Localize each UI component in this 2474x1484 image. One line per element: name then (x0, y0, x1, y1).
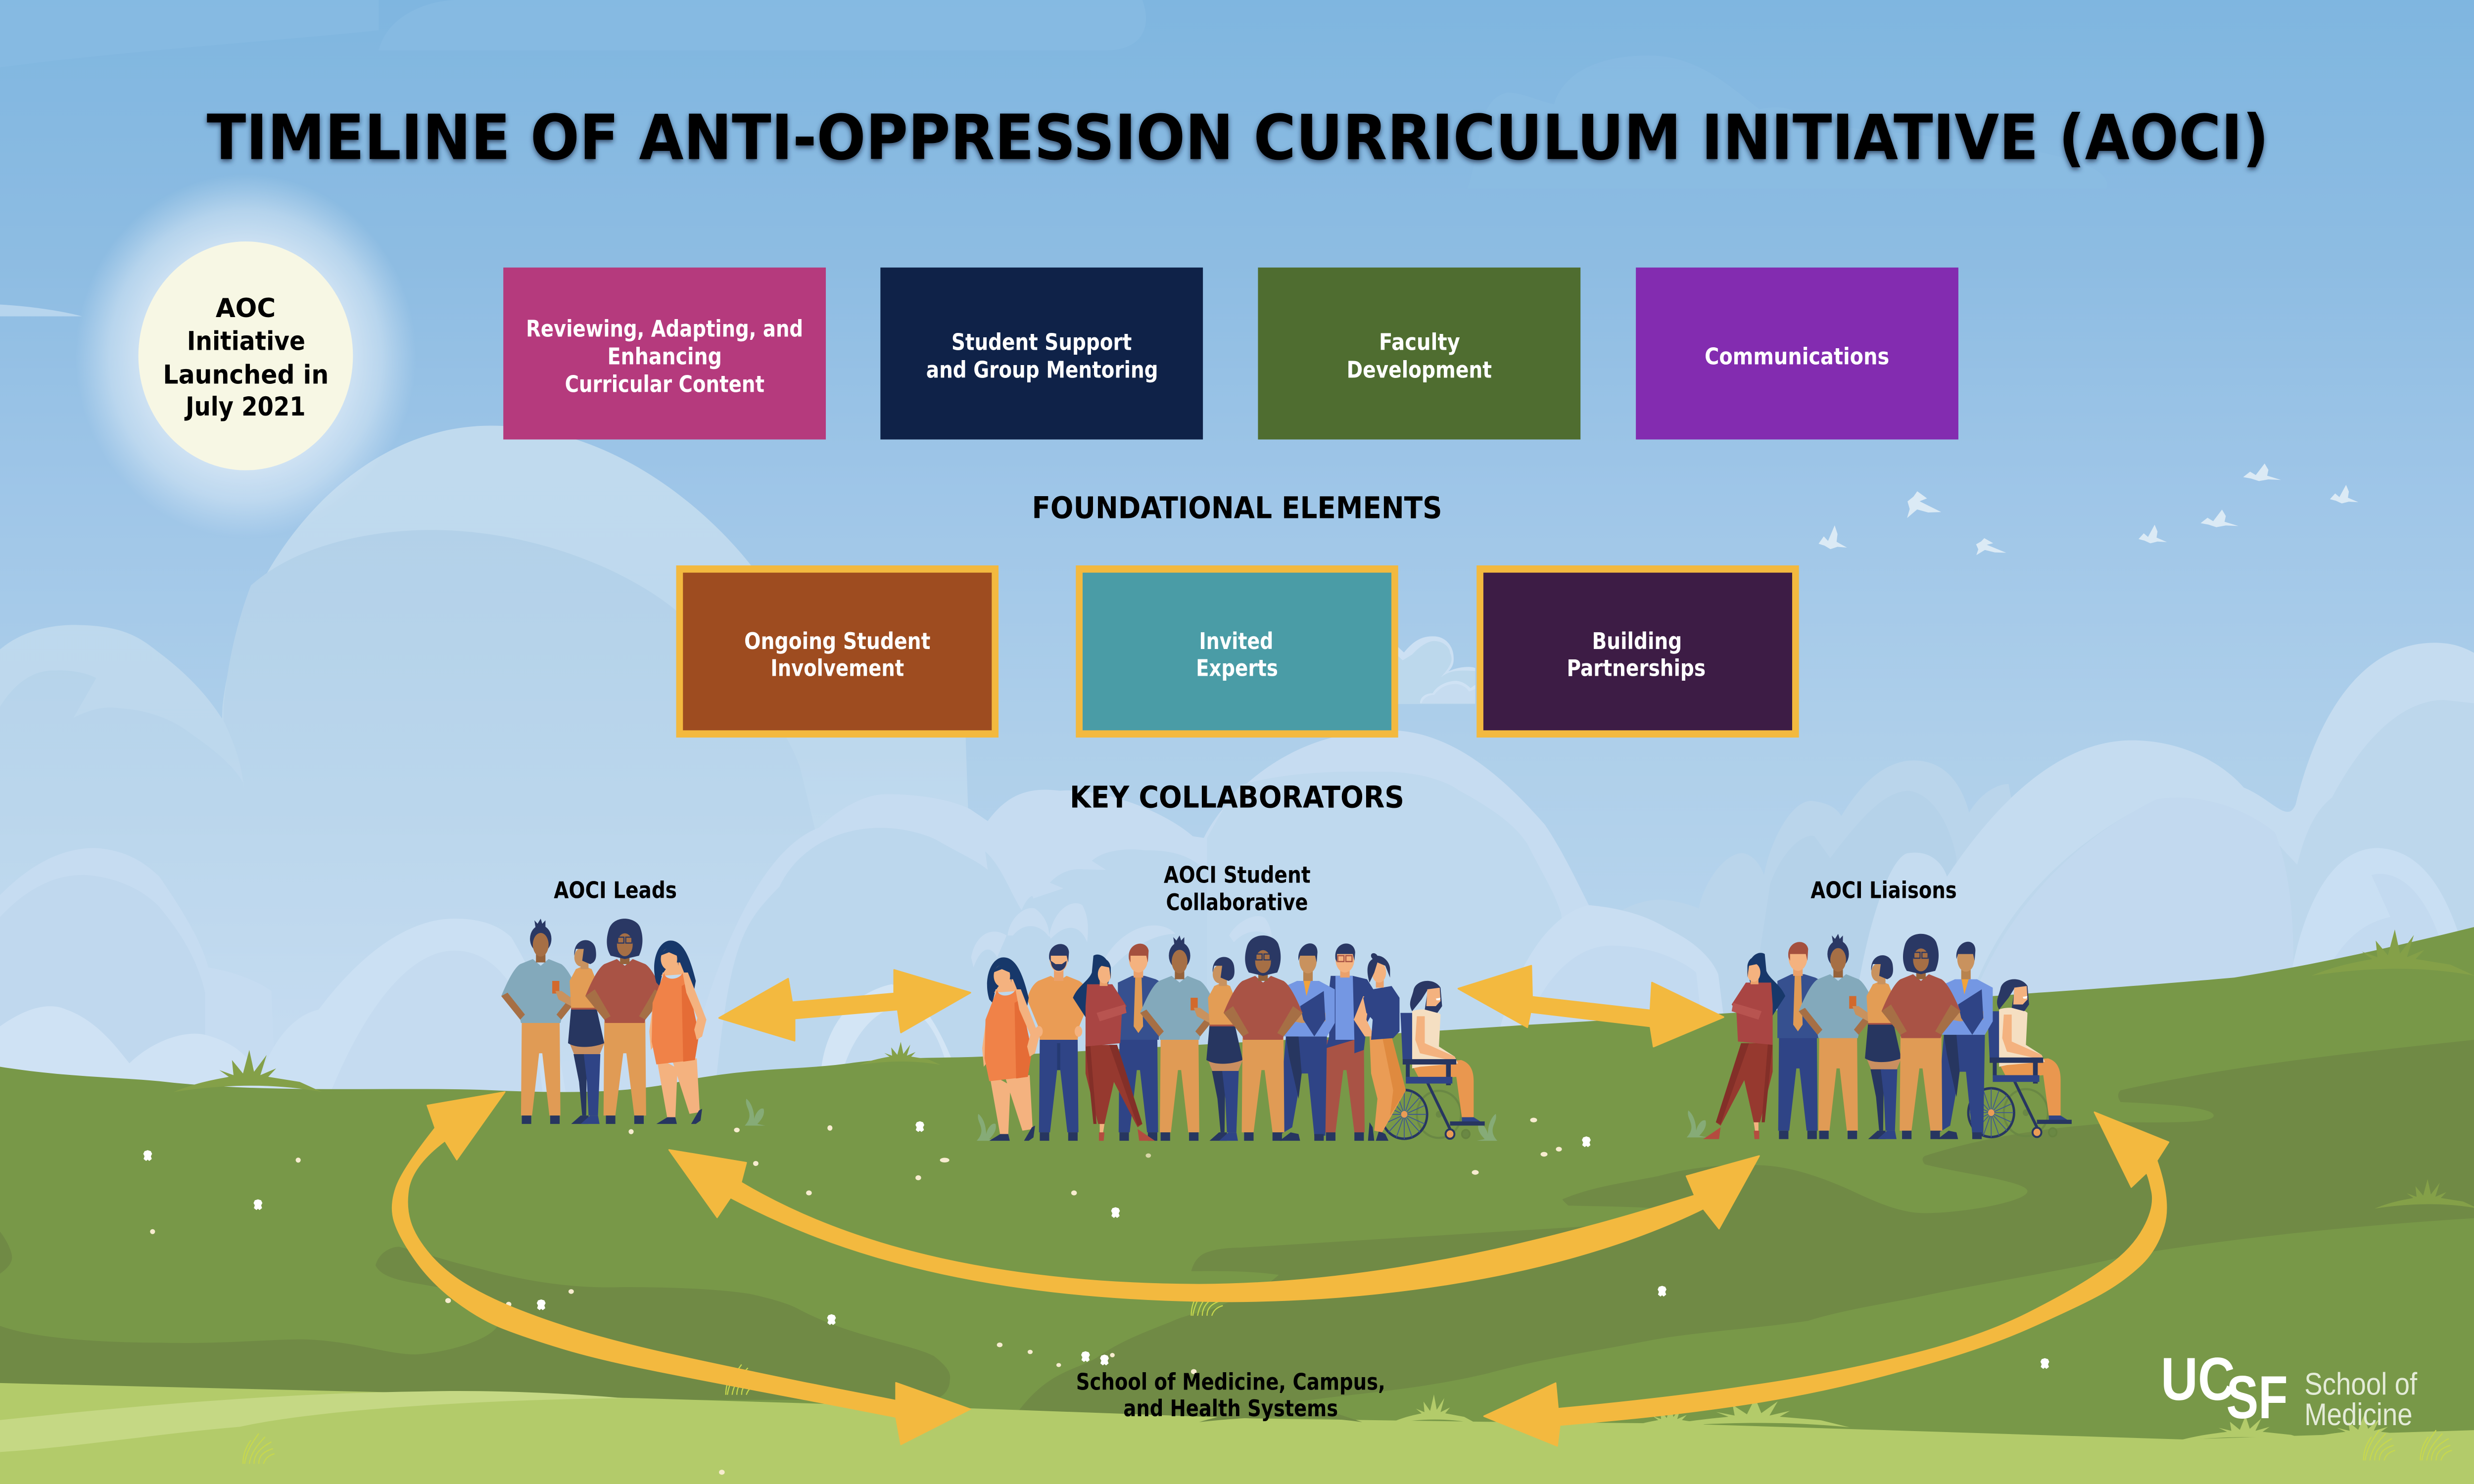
panel: ongoing student involvement (679, 569, 995, 734)
group: AOCI Student Collaborative people (982, 935, 1485, 1141)
panel: invited experts (1079, 569, 1395, 734)
UCSF School of Medicine logo: School of (2304, 1367, 2418, 1401)
label: AOCI Liaisons: AOCI Liaisons (1810, 878, 1957, 904)
panel: reviewing curricular content: Reviewing, Adapting, and (526, 316, 803, 342)
panel: building partnerships: Partnerships (1567, 655, 1706, 682)
sun callout: initiative launch: AOC (216, 294, 276, 324)
sun callout: initiative launch: Initiative (187, 326, 305, 357)
heading: key collaborators: KEY COLLABORATORS (1070, 780, 1404, 815)
group: AOCI Liaisons people (1703, 934, 2072, 1139)
panel: invited experts: Invited (1199, 629, 1273, 654)
sun callout: initiative launch: Launched in (163, 360, 329, 390)
main green hill (0, 927, 2474, 1484)
UCSF School of Medicine logo: UC (2161, 1346, 2235, 1413)
UCSF School of Medicine logo (2161, 1346, 2418, 1432)
panel: student support: Student Support (952, 329, 1132, 356)
dark hill shadow right (1019, 1040, 2474, 1422)
label: AOCI Student Collaborative: AOCI Student (1164, 862, 1311, 888)
bottom light-green foreground (0, 1383, 2474, 1484)
panel: reviewing curricular content (503, 268, 826, 439)
panel: building partnerships: Building (1592, 629, 1682, 654)
meadow flowers (143, 1118, 2049, 1475)
sun callout: initiative launch (139, 241, 353, 470)
dark hill shadow left edge (0, 1232, 12, 1274)
label: AOCI Student Collaborative (1164, 862, 1311, 916)
panel: reviewing curricular content: Enhancing (608, 344, 722, 370)
UCSF School of Medicine logo: SF (2226, 1364, 2288, 1432)
faint high clouds (0, 0, 2107, 188)
panel: building partnerships (1480, 569, 1796, 734)
dark hill shadow left (0, 1247, 950, 1400)
panel: ongoing student involvement: Involvement (770, 655, 904, 682)
panel: faculty development: Development (1347, 357, 1492, 383)
panel: student support (880, 268, 1203, 439)
panel: faculty development: Faculty (1379, 329, 1460, 356)
label: School of Medicine, Campus, and Health Systems (1076, 1369, 1385, 1422)
UCSF School of Medicine logo: Medicine (2304, 1397, 2413, 1432)
small plants by the groups (745, 1099, 1707, 1141)
label: School of Medicine, Campus, and Health Systems: and Health Systems (1123, 1396, 1338, 1422)
panel: faculty development (1258, 268, 1580, 439)
arrow: Leads to Student Collaborative (719, 970, 970, 1041)
group: AOCI Leads people (501, 919, 707, 1124)
panel: reviewing curricular content: Curricular Content (565, 371, 764, 398)
heading: foundational elements: FOUNDATIONAL ELEMENTS (1032, 491, 1442, 525)
sun callout: initiative launch: July 2021 (185, 392, 306, 422)
feathered cloud tops behind the students (971, 903, 1272, 968)
arrow: Student Collaborative to Liaisons (1458, 966, 1723, 1047)
arrow: Leads to School of Medicine curved (392, 1092, 970, 1444)
cloud wisp left (0, 305, 82, 316)
panel: invited experts: Experts (1196, 655, 1278, 682)
panel: student support: and Group Mentoring (926, 357, 1158, 383)
sun glow (75, 174, 416, 538)
panel: ongoing student involvement: Ongoing Student (744, 629, 930, 654)
panel: communications: Communications (1705, 344, 1889, 370)
foreground light stripe (0, 1391, 623, 1452)
small cloud behind Invited Experts (1396, 636, 1475, 704)
clouds left and centre (0, 426, 1736, 1111)
clouds right (1483, 643, 2474, 1111)
label: AOCI Student Collaborative: Collaborative (1166, 890, 1308, 916)
label: AOCI Leads: AOCI Leads (554, 878, 677, 904)
arrow: School of Medicine to Liaisons curved (1484, 1112, 2169, 1446)
panel: communications (1636, 268, 1958, 439)
grass tufts (174, 929, 2474, 1464)
flying birds (1818, 464, 2358, 560)
title: TIMELINE OF ANTI-OPPRESSION CURRICULUM INITIATIVE (AOCI) (207, 101, 2269, 174)
arrow: Leads to Liaisons curved (669, 1150, 1759, 1301)
label: School of Medicine, Campus, and Health Systems: School of Medicine, Campus, (1076, 1369, 1385, 1395)
